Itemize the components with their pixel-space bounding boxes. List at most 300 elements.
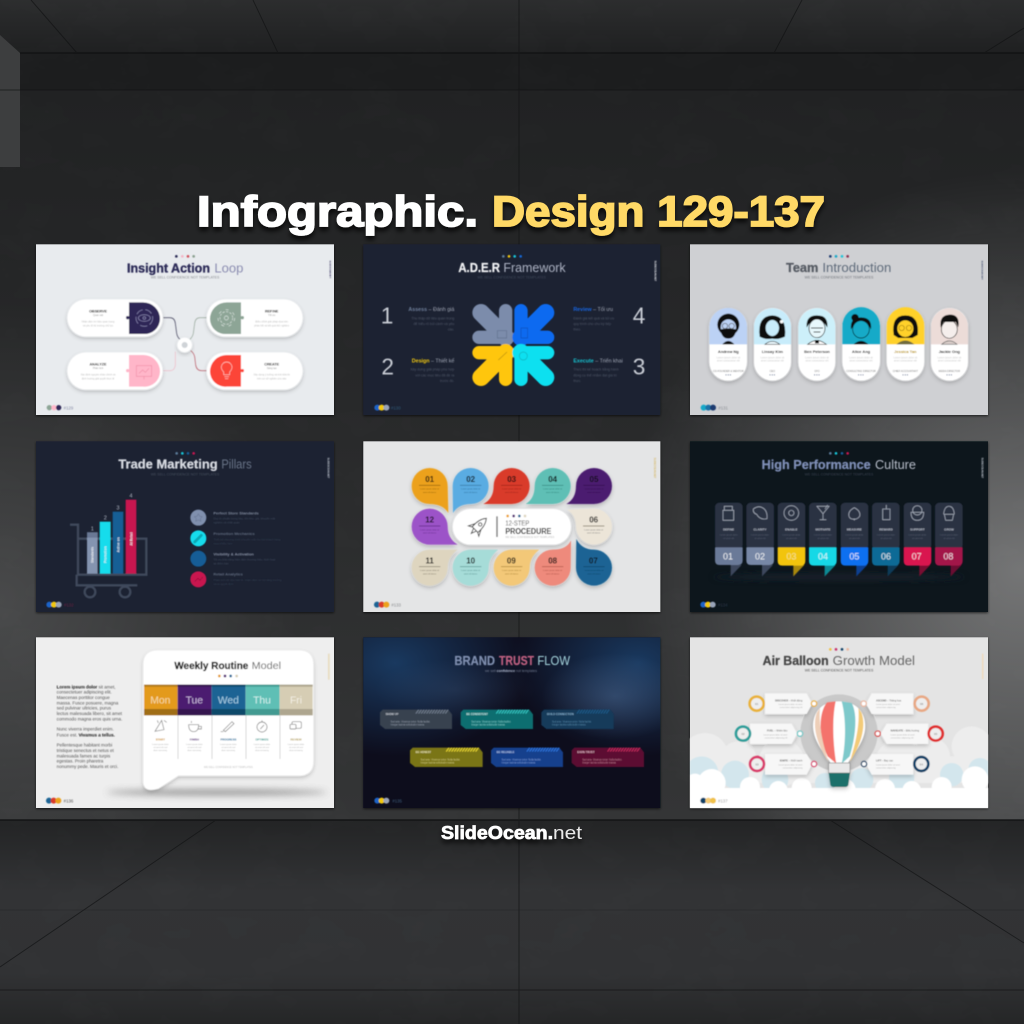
- step 11: 11: [425, 556, 434, 565]
- step 04: [526, 468, 571, 504]
- heading: WE SELL CONFIDENCE NOT TEMPLATES: [151, 276, 220, 280]
- card 08: 08: [943, 552, 953, 562]
- step 2: 2: [381, 354, 394, 380]
- pillar 2: mua nhiều hơn: [213, 541, 233, 545]
- step: observe: [67, 299, 163, 337]
- callout 04: Lorem ipsum dolor sit amet: [876, 763, 900, 766]
- balloon: [813, 701, 865, 787]
- callout 03: consectetur adipiscing: [783, 766, 802, 769]
- step 1: cầu.: [448, 328, 454, 332]
- pillar 4: Retail Analytics: [213, 572, 244, 577]
- slide number: #135: [392, 798, 403, 803]
- step 03: amet elit donec: [505, 491, 518, 494]
- step 07: amet elit donec: [587, 572, 601, 575]
- column: Wednesday: Wed: [218, 696, 239, 707]
- card 01: [715, 503, 743, 576]
- heading: Team: [786, 260, 818, 275]
- step: analyze: ANALYZE: [90, 362, 107, 366]
- slide number: [374, 405, 401, 411]
- panel: 132 Trade Marketing Pillars: [36, 441, 334, 612]
- step 03: [483, 468, 530, 504]
- step: refine: phản hồi và kết quả thử nghiệm: [254, 324, 289, 327]
- step 06: 06: [589, 516, 599, 525]
- card 02: sit amet elit: [755, 537, 766, 540]
- member: Jessica Tan: CHIEF ACCOUNTANT: [893, 370, 918, 373]
- title: Design 129-137: [492, 188, 825, 236]
- member: Linsay Kim: CEO: [770, 370, 775, 373]
- slide number: [700, 798, 728, 804]
- step 2: [381, 354, 454, 383]
- step: analyze: [67, 352, 163, 390]
- body text: Nunc viverra imperdiet enim.: [57, 727, 114, 732]
- step 12: amet elit donec: [423, 532, 436, 535]
- column: Wednesday: sit amet elit sed: [221, 746, 235, 749]
- member: Alice Ang: [842, 307, 880, 381]
- step 3: [573, 354, 645, 383]
- callout 01: 01: [755, 702, 759, 706]
- heading: Loop: [214, 260, 243, 275]
- callout 04: LIFT – Bay cao: [876, 760, 894, 763]
- step 1: Thu thập dữ liệu quan trọng: [411, 316, 454, 320]
- column: Tuesday: [178, 685, 212, 752]
- step 07: [576, 539, 612, 586]
- callout 02: 02: [741, 732, 745, 736]
- slide number: [374, 602, 402, 608]
- step 10: 10: [466, 556, 476, 565]
- step 08: Lorem ipsum dolor sit: [543, 569, 563, 572]
- side label: SLIDEOCEAN.NET: [653, 261, 656, 282]
- column: Friday: Fri: [290, 696, 302, 707]
- column: Friday: Lorem ipsum dolor: [288, 743, 305, 746]
- callout 02: [736, 724, 803, 744]
- body text: Pellentesque habitant morbi: [57, 743, 112, 748]
- card 03: [778, 503, 805, 576]
- callout 01: consectetur adipiscing elit: [780, 706, 803, 709]
- body text: tristique senectus et netus et: [57, 748, 115, 753]
- body text: Lorem ipsum dolor sit amet,: [57, 684, 115, 689]
- heading: FLOW: [537, 653, 571, 668]
- card: be reliable: BE RELIABLE: [497, 750, 515, 754]
- body text: [57, 684, 123, 769]
- bar chart: Promotion: [104, 546, 108, 563]
- card: show up: SHOW UP: [386, 712, 399, 716]
- heading: Pillars: [221, 457, 252, 472]
- card 07: Lorem ipsum dolor: [908, 534, 927, 537]
- step 10: [453, 550, 498, 586]
- member: Ben Peterson: Ben Peterson: [804, 349, 830, 354]
- step 09: 09: [507, 556, 516, 565]
- arrows: [479, 311, 548, 379]
- callout 05: 05: [934, 732, 938, 736]
- heading: WE SELL CONFIDENCE NOT TEMPLATES: [805, 473, 874, 477]
- side label: SLIDEOCEAN.NET: [981, 458, 984, 479]
- pillar 2: Thiết kế chương trình khuyến mãi thu hút khách hàng: [213, 537, 281, 541]
- card 08: sit amet elit: [944, 537, 955, 540]
- panel: 130 ADER framework: [363, 244, 660, 415]
- heading: Air Balloon: [763, 653, 829, 668]
- member: Ben Peterson: Lorem ipsum dolor sit: [805, 356, 829, 359]
- member: Jessica Tan: [887, 307, 924, 381]
- basket: [829, 763, 850, 787]
- step 08: [535, 540, 571, 586]
- bar chart: 3: [116, 505, 120, 511]
- floor shadow: [712, 575, 966, 579]
- card: earn trust: Sed ante. Vivamus tortor. Nulla facilisi.: [582, 758, 622, 761]
- step 01: amet elit donec: [423, 491, 436, 494]
- member: Jackie Ong: ● ● ●: [946, 373, 953, 376]
- panel: 129 Insight Action Loop: [36, 244, 334, 415]
- card: be reliable: Sed ante. Vivamus tortor. Nulla facilisi.: [502, 758, 542, 761]
- member: Jessica Tan: Lorem ipsum dolor sit: [893, 356, 918, 359]
- pillar 1: nghiêm và nhất quán: [213, 521, 240, 525]
- column: Wednesday: PROGRESS: [220, 738, 236, 742]
- heading: A.D.E.R: [458, 260, 501, 275]
- step 4: theo.: [573, 328, 581, 332]
- member: Andrew Ng: ● ● ●: [725, 373, 732, 376]
- pillar 3: Visibility & Activation: [213, 551, 254, 556]
- heading: [458, 260, 566, 280]
- callout 04: consectetur adipiscing: [876, 766, 896, 769]
- callout 03: [750, 754, 817, 775]
- card: show up: [380, 710, 452, 729]
- panel: 135 Brand Trust Flow: [262, 570, 765, 808]
- panel: 131 Team Introduction: [690, 244, 988, 415]
- body text: lectus malesuada libero, sit amet: [57, 711, 123, 716]
- slide number: #134: [718, 602, 728, 607]
- step 11: [412, 550, 458, 586]
- card 01: Lorem ipsum dolor: [720, 534, 738, 537]
- card 05: Lorem ipsum dolor: [845, 534, 864, 537]
- side label: SLIDEOCEAN.NET: [653, 458, 656, 479]
- callout 04: [861, 754, 928, 775]
- card 01: DEFINE: [723, 527, 734, 531]
- pillar 3: Tối ưu khả năng hiện diện thương hiệu, kích hoạt: [213, 558, 276, 562]
- card: build connection: BUILD CONNECTION: [547, 712, 574, 716]
- side label: SLIDEOCEAN.NET: [981, 261, 984, 280]
- dots: [175, 452, 195, 455]
- step 06: amet elit donec: [587, 532, 600, 535]
- step: create: Sáng tạo: [267, 367, 277, 370]
- step 4: [573, 302, 645, 332]
- card 05: MEASURE: [847, 527, 862, 531]
- brand footer: SlideOcean.: [441, 822, 553, 843]
- card 02: 02: [755, 552, 765, 562]
- body text: commodo magna eros quis urna.: [57, 716, 122, 721]
- heading: TRUST: [499, 653, 534, 668]
- card: be consistent: Sed ante. Vivamus tortor. Nulla facilisi.: [471, 720, 511, 723]
- callout 01: Lorem ipsum dolor sit amet: [778, 703, 803, 706]
- card: build connection: Sed ante. Vivamus tortor. Nulla facilisi.: [552, 720, 592, 723]
- body text: consectetuer adipiscing elit.: [57, 690, 112, 695]
- dots: [218, 675, 238, 677]
- heading: WE SELL CONFIDENCE NOT TEMPLATES: [805, 669, 874, 673]
- column: Monday: sit amet elit sed: [153, 746, 167, 749]
- card 08: Lorem ipsum dolor: [940, 534, 958, 537]
- slide number: #137: [718, 798, 728, 803]
- column: Friday: diam nonummy: [289, 750, 303, 752]
- member: Alice Ang: Alice Ang: [852, 349, 871, 354]
- step 01: [412, 468, 448, 513]
- heading: Insight Action: [127, 260, 210, 275]
- step: refine: REFINE: [265, 309, 279, 313]
- step: observe: Nhận diện tín hiệu quan trọng: [82, 320, 115, 323]
- step: create: Xây dựng ý tưởng và tính khả thi: [254, 373, 290, 376]
- card: be consistent: BE CONSISTENT: [466, 712, 488, 716]
- hub: [177, 338, 192, 352]
- step: observe: Quan sát: [93, 314, 103, 317]
- heading: we sell confidence not templates: [485, 669, 537, 673]
- step 4: quy trình cho chu kỳ tiếp: [573, 322, 611, 326]
- slide number: [701, 405, 729, 411]
- card: be honest: Sed ante. Vivamus tortor. Nulla facilisi.: [421, 758, 461, 761]
- heading: [454, 653, 571, 673]
- step 1: [381, 302, 454, 332]
- pillar 3: tại điểm bán: [213, 562, 229, 566]
- heading: [762, 457, 916, 477]
- side label: SLIDEOCEAN.NET: [327, 458, 330, 479]
- side label: SLIDEOCEAN.NET: [329, 261, 332, 279]
- step 05: Lorem ipsum dolor sit: [585, 488, 604, 491]
- member: Jackie Ong: [931, 308, 968, 381]
- member: Alice Ang: CONSULTING DIRECTOR: [846, 370, 876, 373]
- speech bubble: WE SELL CONFIDENCE NOT TEMPLATES: [204, 766, 253, 769]
- member: Jessica Tan: Jessica Tan: [894, 349, 917, 354]
- step: create: CREATE: [264, 362, 280, 366]
- body text: massa. Fusce posuere, magna: [57, 700, 119, 705]
- step 03: 03: [507, 475, 517, 484]
- step 03: Lorem ipsum dolor sit: [502, 488, 522, 491]
- step 12: Lorem ipsum dolor sit: [420, 528, 440, 531]
- card 06: sit amet elit: [881, 537, 892, 540]
- step 07: Lorem ipsum dolor sit: [585, 569, 604, 572]
- step 1: Assess – Đánh giá: [408, 307, 454, 313]
- column: Monday: [144, 685, 178, 752]
- card: earn trust: Integer lacinia sollicitudin massa.: [582, 762, 617, 765]
- callout 05: [875, 724, 943, 744]
- step 4: Đánh giá kết quả và tối ưu: [573, 316, 614, 320]
- slide number: [46, 798, 74, 804]
- body text: malesuada fames ac turpis: [57, 753, 111, 758]
- step 1: 1: [381, 302, 393, 328]
- callout 06: 06: [920, 702, 924, 706]
- pillar 3: [190, 551, 276, 567]
- card: be reliable: [491, 748, 563, 767]
- card 03: ENABLE: [785, 527, 797, 531]
- card: show up: Sed ante. Vivamus tortor. Nulla facilisi.: [391, 720, 431, 723]
- column: Thursday: sit amet elit sed: [255, 746, 269, 749]
- step 1: để hiểu rõ bối cảnh và yêu: [413, 322, 454, 326]
- callout 04: 04: [920, 762, 923, 766]
- card 02: Lorem ipsum dolor: [751, 534, 769, 537]
- panel: 134 High Performance Culture: [690, 441, 988, 612]
- side label: [982, 654, 983, 679]
- step 11: amet elit donec: [423, 572, 436, 575]
- slide number: #129: [64, 405, 74, 410]
- step: observe: OBSERVE: [89, 309, 107, 313]
- heading: Introduction: [822, 260, 891, 275]
- step 02: Lorem ipsum dolor sit: [461, 488, 481, 491]
- column: Thursday: Lorem ipsum dolor: [254, 743, 271, 746]
- pillar 1: [190, 510, 275, 526]
- member: Jackie Ong: MEDIA DIRECTOR: [939, 370, 960, 373]
- step: refine: [207, 299, 303, 337]
- column: Thursday: Thu: [253, 696, 271, 707]
- heading: BRAND: [454, 653, 495, 668]
- heading: WE SELL CONFIDENCE NOT TEMPLATES: [805, 276, 874, 280]
- step 04: amet elit donec: [546, 491, 559, 494]
- column: Friday: [280, 685, 313, 752]
- card: be consistent: [461, 710, 533, 729]
- pillar 4: Phân tích dữ liệu bán lẻ, nhận diện cơ hội tăng trưởng: [213, 578, 282, 582]
- dots: [502, 255, 522, 258]
- step 4: Review – Tối ưu: [573, 307, 613, 313]
- card 05: 05: [849, 552, 859, 562]
- bar chart: Active on: [116, 537, 120, 552]
- shopping cart: [70, 525, 146, 597]
- dots: [829, 452, 849, 455]
- side label: [328, 654, 330, 680]
- step 2: trước đó.: [440, 379, 454, 383]
- card 06: 06: [881, 552, 891, 562]
- step: refine: Điều chỉnh giải pháp dựa trên: [255, 320, 289, 323]
- member: Jackie Ong: amet consectetur elit: [938, 360, 961, 363]
- bar chart: [87, 494, 136, 574]
- bar chart: Standards: [91, 547, 95, 563]
- callout 03: 03: [755, 762, 759, 766]
- step 05: amet elit donec: [587, 491, 601, 494]
- column: Tuesday: Tue: [186, 696, 203, 707]
- heading: [786, 260, 891, 280]
- step: observe: và yêu tố thị trường chủ lực: [83, 324, 114, 327]
- slide number: [374, 798, 403, 804]
- member: Jessica Tan: ● ● ●: [902, 373, 909, 376]
- heading: [127, 260, 243, 280]
- slide number: [700, 602, 728, 608]
- member: Ben Peterson: CFO: [814, 370, 820, 373]
- title: Infographic.: [197, 188, 478, 236]
- card 02: CLARITY: [754, 527, 766, 531]
- slide number: #136: [64, 798, 74, 803]
- card 07: sit amet elit: [912, 537, 923, 540]
- dots: [175, 255, 195, 258]
- step 10: Lorem ipsum dolor sit: [461, 569, 481, 572]
- callout 03: IGNITE – Khởi tranh: [780, 760, 803, 763]
- body text: sed pulvinar ultricies, purus: [57, 706, 112, 711]
- step 09: [494, 550, 539, 586]
- card: be honest: BE HONEST: [416, 750, 432, 754]
- step 05: 05: [590, 475, 599, 484]
- callout 06: consectetur adipiscing: [876, 706, 896, 709]
- step 2: với các mục tiêu đã đề ra: [415, 373, 454, 377]
- column: Friday: REVIEW: [290, 738, 302, 742]
- step 2: Xây dựng giải pháp phù hợp: [410, 368, 454, 372]
- step: refine: Tối ưu: [268, 314, 276, 317]
- step 01: 01: [425, 475, 435, 484]
- member: Linsay Kim: [754, 308, 791, 381]
- step: analyze: Xác định nguyên nhân chính và: [81, 373, 116, 376]
- column: Tuesday: sit amet elit sed: [187, 746, 201, 749]
- callout 05: NAVIGATE – Điều hướng: [891, 730, 920, 733]
- column: Monday: Mon: [150, 696, 171, 707]
- body text: nonummy pede. Mauris et orci.: [57, 764, 118, 769]
- member: Andrew Ng: amet consectetur elit: [717, 360, 740, 363]
- heading: Growth Model: [833, 653, 915, 668]
- step 08: amet elit donec: [546, 572, 559, 575]
- step 02: [453, 468, 489, 513]
- column: Tuesday: diam nonummy: [188, 750, 201, 752]
- slide number: #130: [391, 405, 401, 410]
- heading: Culture: [875, 457, 916, 472]
- card: earn trust: [572, 748, 644, 767]
- card 08: [935, 503, 963, 576]
- icon: rocket: [466, 513, 492, 539]
- heading: Trade Marketing: [118, 457, 218, 472]
- card 05: [841, 503, 868, 576]
- column: Monday: diam nonummy: [154, 750, 167, 752]
- card 07: [904, 503, 931, 576]
- step: create: trên cơ sở nghiên cứu sâu: [257, 377, 287, 380]
- card 04: sit amet elit: [818, 537, 829, 540]
- panel: 136 Weekly Routine Model: [36, 637, 334, 808]
- step 10: amet elit donec: [464, 572, 477, 575]
- step 04: 04: [548, 475, 558, 484]
- callout 05: Lorem ipsum dolor sit amet: [891, 733, 915, 736]
- step 3: 3: [633, 354, 645, 380]
- card 03: sit amet elit: [786, 537, 797, 540]
- member: Linsay Kim: Linsay Kim: [762, 349, 783, 354]
- member: Ben Peterson: ● ● ●: [814, 373, 820, 376]
- card: be honest: [410, 748, 483, 767]
- card 04: MOTIVATE: [816, 527, 830, 531]
- member: Andrew Ng: Lorem ipsum dolor sit: [716, 356, 741, 359]
- heading: Model: [252, 661, 281, 672]
- column: Wednesday: [212, 685, 246, 752]
- bar chart: At Retail: [129, 532, 133, 546]
- card 04: [809, 503, 837, 576]
- card 07: 07: [912, 552, 922, 562]
- step 06: Lorem ipsum dolor sit: [584, 528, 604, 531]
- member: Alice Ang: Lorem ipsum dolor sit: [849, 356, 873, 359]
- step 3: Thực thi kế hoạch bằng hành: [573, 367, 619, 372]
- pillar 2: [190, 530, 281, 546]
- step 09: Lorem ipsum dolor sit: [502, 569, 522, 572]
- card: show up: Integer lacinia sollicitudin massa.: [391, 724, 425, 727]
- member: Andrew Ng: [709, 308, 747, 381]
- step 07: 07: [589, 556, 598, 565]
- bar chart: 1: [91, 526, 94, 532]
- member: Linsay Kim: ● ● ●: [769, 373, 776, 376]
- heading: Weekly Routine: [174, 661, 249, 672]
- heading: Framework: [503, 260, 566, 275]
- heading: WE SELL CONFIDENCE NOT TEMPLATES: [477, 276, 547, 280]
- step 01: Lorem ipsum dolor sit: [420, 488, 440, 491]
- card 07: SUPPORT: [910, 527, 925, 531]
- dots: [829, 648, 849, 651]
- heading: [763, 653, 915, 673]
- floor shadow: [107, 789, 327, 795]
- center pill: PROCEDURE: [505, 527, 552, 536]
- slide number: #133: [391, 602, 402, 607]
- slide number: #132: [64, 602, 74, 607]
- card 03: Lorem ipsum dolor: [782, 534, 801, 537]
- panel: 133 12-step procedure: [363, 441, 660, 612]
- connectors: [163, 318, 207, 371]
- card 06: REWARD: [879, 527, 893, 531]
- card 04: Lorem ipsum dolor: [814, 534, 832, 537]
- callout 06: Lorem ipsum dolor sit amet: [876, 703, 900, 706]
- step 3: Execute – Triển khai: [573, 357, 623, 364]
- callout 03: Lorem ipsum dolor sit amet: [778, 763, 803, 766]
